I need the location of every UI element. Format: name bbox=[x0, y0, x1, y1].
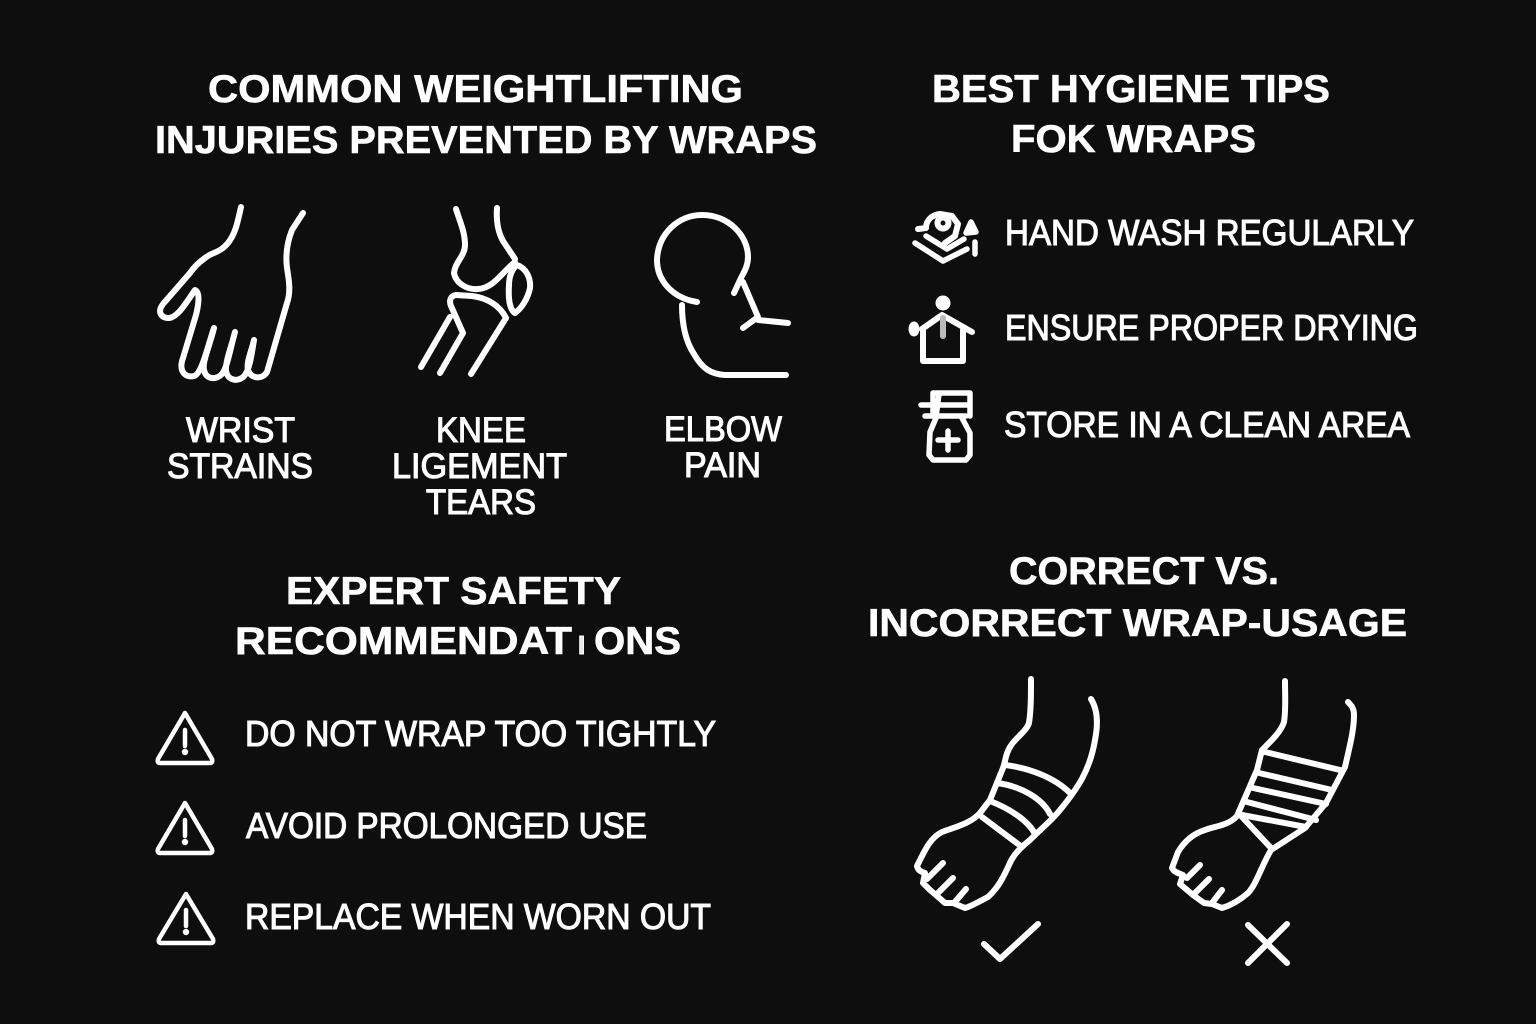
heading: best hygiene tips: FOK WRAPS bbox=[1011, 118, 1256, 161]
icon: warning triangle 3 bbox=[159, 894, 213, 943]
label: knee ligament tears: TEARS bbox=[426, 483, 536, 522]
heading: expert safety recommendations bbox=[235, 570, 681, 663]
label: elbow pain: PAIN bbox=[684, 446, 761, 485]
heading: correct vs incorrect wrap usage: INCORRECT WRAP-USAGE bbox=[868, 602, 1407, 645]
panel: expert safety bbox=[158, 570, 716, 943]
panel: hygiene tips bbox=[912, 68, 1418, 460]
text: ensure proper drying: ENSURE PROPER DRYING bbox=[1005, 307, 1418, 348]
label: knee ligament tears bbox=[392, 411, 567, 522]
heading: best hygiene tips bbox=[932, 68, 1330, 161]
label: wrist strains: WRIST bbox=[186, 411, 295, 450]
icon: warning triangle 2 bbox=[158, 803, 212, 853]
icon: incorrectly wrapped arm bbox=[1172, 681, 1354, 908]
text: replace when worn out: REPLACE WHEN WORN OUT bbox=[245, 896, 711, 937]
text: store in a clean area: STORE IN A CLEAN AREA bbox=[1004, 404, 1410, 445]
icon: correctly wrapped arm bbox=[917, 679, 1097, 908]
label: wrist strains: STRAINS bbox=[167, 447, 313, 486]
icon: hand wash bbox=[915, 214, 976, 261]
text: hand wash regularly: HAND WASH REGULARLY bbox=[1005, 212, 1414, 253]
icon: check mark bbox=[984, 924, 1038, 959]
icon: elbow bbox=[657, 215, 788, 375]
text: avoid prolonged use: AVOID PROLONGED USE bbox=[246, 805, 647, 846]
heading: expert safety recommendations: EXPERT SAFETY bbox=[286, 570, 621, 613]
icon: spray bottle bbox=[921, 393, 970, 460]
heading: expert safety recommendations: ONS bbox=[594, 620, 681, 663]
heading: expert safety recommendations: RECOMMENDAT bbox=[235, 620, 572, 663]
heading: common weightlifting injuries bbox=[155, 68, 817, 162]
icon: knee bbox=[421, 208, 530, 374]
heading: common weightlifting injuries: COMMON WEIGHTLIFTING bbox=[208, 68, 743, 111]
icon: cross mark bbox=[1248, 924, 1287, 963]
label: elbow pain: ELBOW bbox=[664, 410, 782, 449]
panel: common injuries bbox=[155, 68, 817, 522]
heading: common weightlifting injuries: INJURIES PREVENTED BY WRAPS bbox=[155, 119, 817, 162]
text: do not wrap too tightly: DO NOT WRAP TOO TIGHTLY bbox=[245, 713, 716, 754]
heading: correct vs incorrect wrap usage: CORRECT VS. bbox=[1009, 550, 1279, 593]
panel: correct vs incorrect bbox=[868, 550, 1407, 963]
label: elbow pain bbox=[664, 410, 782, 485]
heading: correct vs incorrect wrap usage bbox=[868, 550, 1407, 645]
label: knee ligament tears: KNEE bbox=[436, 411, 526, 450]
icon: warning triangle 1 bbox=[158, 713, 212, 763]
label: knee ligament tears: LIGEMENT bbox=[392, 447, 567, 486]
heading: best hygiene tips: BEST HYGIENE TIPS bbox=[932, 68, 1330, 111]
icon: wrist bbox=[160, 207, 303, 380]
heading: expert safety recommendations: I bbox=[578, 630, 585, 660]
icon: drying house bbox=[912, 298, 972, 361]
label: wrist strains bbox=[167, 411, 313, 486]
